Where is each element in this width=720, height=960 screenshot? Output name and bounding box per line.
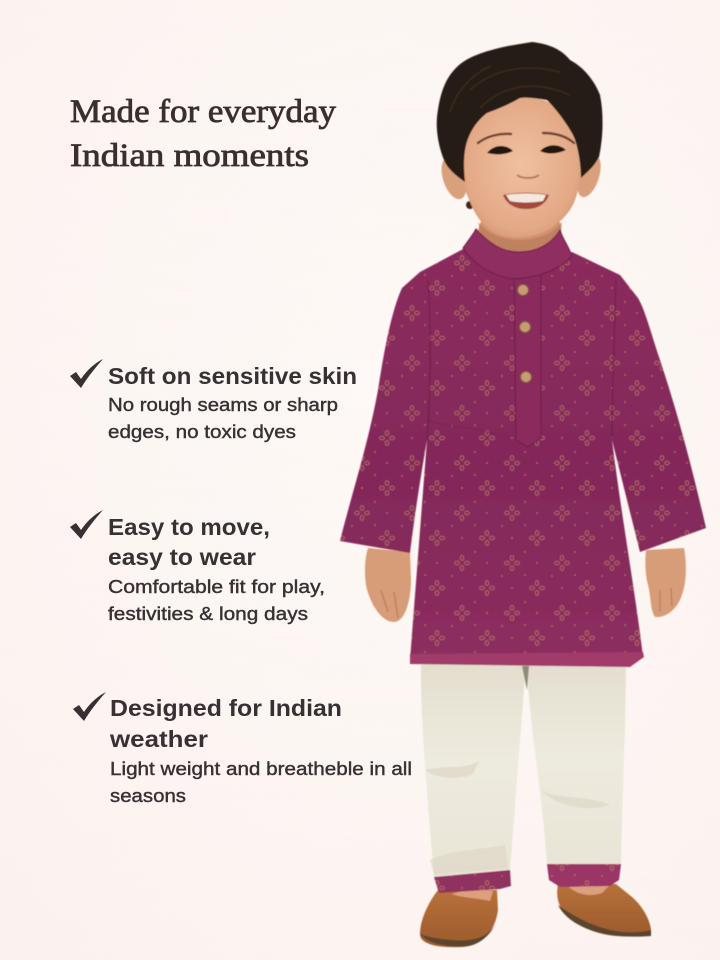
buttons xyxy=(518,284,532,382)
feature description: Comfortable fit for play, xyxy=(108,577,325,597)
feature description xyxy=(110,759,412,806)
illustration: smiling boy in kurta xyxy=(340,42,706,947)
kurta hem xyxy=(410,652,644,667)
feature description: Light weight and breatheble in all xyxy=(110,759,412,779)
hair xyxy=(437,42,603,182)
feature heading: easy to wear xyxy=(108,544,256,570)
feature: easy to move, easy to wear xyxy=(70,510,325,624)
hands xyxy=(365,548,686,622)
kurta folds and seams xyxy=(427,280,616,440)
feature: soft on sensitive skin xyxy=(70,359,357,442)
kurta xyxy=(340,229,706,667)
trouser cuffs xyxy=(434,864,621,893)
feature heading: Soft on sensitive skin xyxy=(108,363,357,389)
title: Made for everyday xyxy=(70,94,337,130)
shoes xyxy=(420,884,651,947)
chin shadow xyxy=(478,222,562,252)
icon: check mark xyxy=(70,510,103,539)
feature description: seasons xyxy=(110,786,186,806)
icon: check mark xyxy=(73,692,106,721)
eyes, brows, nose and mouth xyxy=(478,133,574,209)
icon: check mark xyxy=(70,359,103,388)
trousers xyxy=(421,650,626,877)
title xyxy=(70,94,337,174)
feature: designed for Indian weather xyxy=(73,692,412,806)
feature heading xyxy=(108,514,270,570)
face xyxy=(462,96,581,238)
feature heading xyxy=(109,695,342,752)
feature description xyxy=(108,395,338,442)
placket xyxy=(514,268,541,447)
collar xyxy=(463,229,572,279)
ears xyxy=(437,152,605,209)
feature description: No rough seams or sharp xyxy=(108,395,338,415)
neck xyxy=(470,218,566,282)
feature heading: weather xyxy=(109,726,208,752)
feature description: edges, no toxic dyes xyxy=(108,422,296,442)
feature heading: Easy to move, xyxy=(108,514,270,540)
feature description: festivities & long days xyxy=(108,604,308,624)
feature description xyxy=(108,577,325,624)
title: Indian moments xyxy=(70,138,309,174)
feature heading: Designed for Indian xyxy=(110,695,342,721)
